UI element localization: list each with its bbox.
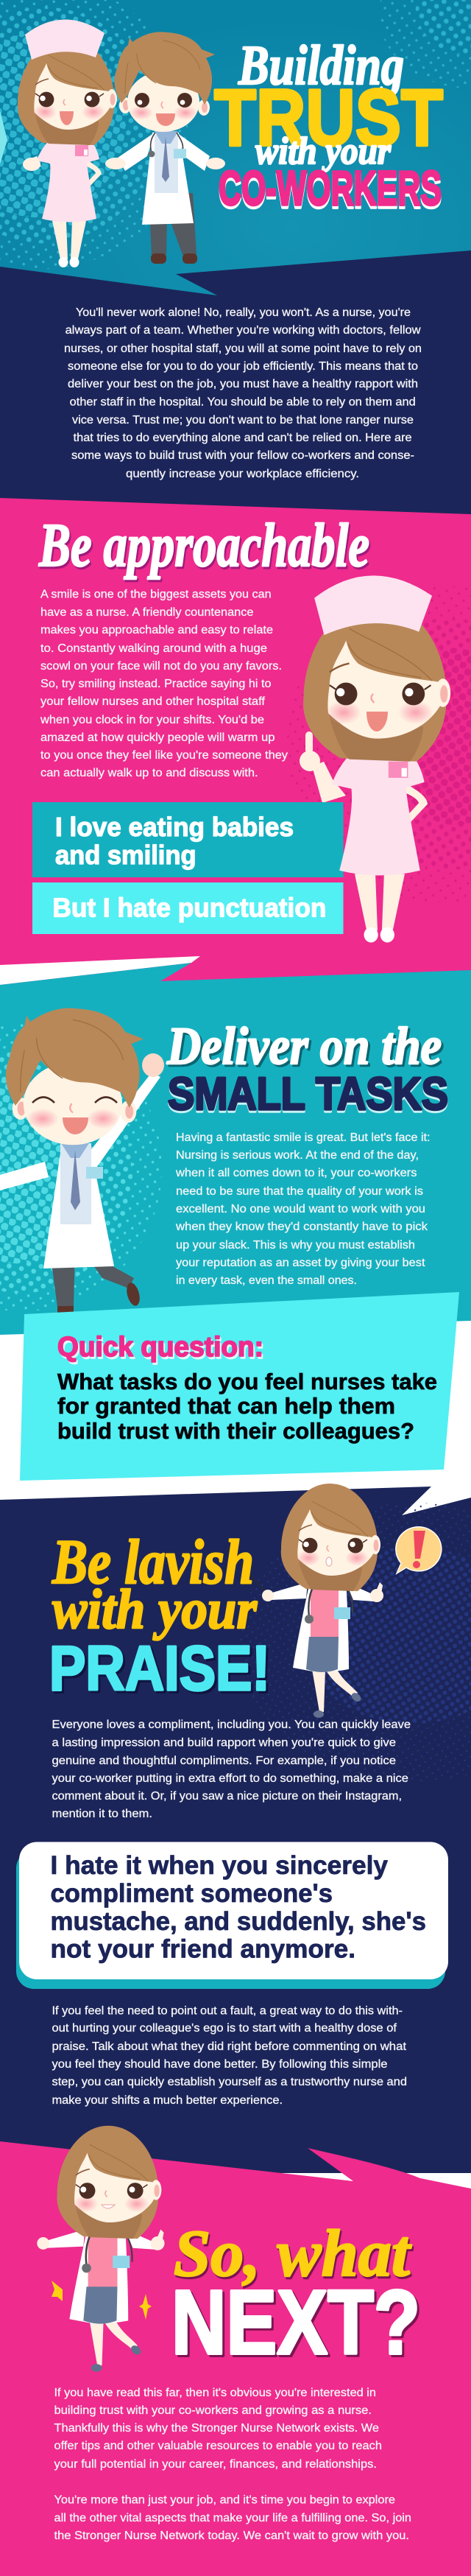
illustration: nurse with thumbs up bbox=[303, 575, 450, 942]
panel: quick question: build trust with their colleagues? bbox=[57, 1418, 414, 1444]
text block: praise paragraph two: step, you can quickly establish yourself as a trustworthy nurse and bbox=[52, 2076, 407, 2088]
callout: I love eating babies: and smiling bbox=[55, 840, 196, 870]
text block: small tasks paragraph bbox=[175, 1131, 430, 1287]
callout: I love eating babies bbox=[32, 802, 343, 877]
icon: sparkle right bbox=[139, 2294, 152, 2320]
callout: mustache quote: compliment someone's bbox=[50, 1879, 333, 1908]
icon: exclamation bubble bbox=[396, 1527, 442, 1573]
heading: Be lavish with your Praise: Be lavish bbox=[52, 1526, 254, 1597]
text block: intro paragraph: other staff in the hospital. You should be able to rely on them and bbox=[70, 396, 416, 408]
text block: praise paragraph two: praise. Talk about what they did right before commenting on what bbox=[52, 2040, 407, 2053]
text block: approachable paragraph: scowl on your face will not do you any favors. bbox=[40, 660, 282, 673]
title: Building Trust with your Co-Workers bbox=[214, 35, 443, 218]
heading: Be lavish with your Praise: PRAISE! bbox=[49, 1634, 270, 1704]
panel: quick question: Quick question: bbox=[57, 1332, 263, 1363]
text block: closing paragraphs: Thankfully this is why the Stronger Nurse Network exists. We bbox=[54, 2422, 379, 2435]
text block: intro paragraph: someone else for you to do your job efficiently. This means that to bbox=[68, 360, 418, 373]
title: Building Trust with your Co-Workers: Building bbox=[238, 35, 404, 96]
text block: approachable paragraph: A smile is one of the biggest assets you can bbox=[40, 588, 272, 601]
nurse character bbox=[18, 19, 117, 267]
panel: quick question bbox=[20, 1292, 459, 1481]
icon: sparkle left bbox=[52, 2281, 63, 2301]
text block: closing paragraphs: your full potential in your career, finances, and relationships. bbox=[54, 2458, 377, 2471]
text block: approachable paragraph: your fellow nurses and other hospital staff bbox=[40, 695, 266, 708]
text block: small tasks paragraph: Having a fantastic smile is great. But let's face it: bbox=[176, 1131, 430, 1144]
text block: intro paragraph bbox=[64, 306, 422, 480]
text block: praise paragraph two bbox=[52, 2005, 407, 2107]
text block: praise paragraph one: comment about it. Or, if you saw a nice picture on their Instagram, bbox=[52, 1790, 402, 1803]
text block: praise paragraph two: If you feel the need to point out a fault, a great way to do this with- bbox=[52, 2005, 403, 2018]
text block: intro paragraph: deliver your best on the job, you must have a healthy rapport with bbox=[68, 378, 418, 390]
text block: approachable paragraph: when you clock in for your shifts. You'd be bbox=[40, 714, 264, 726]
heading: So, what Next: So, what bbox=[174, 2217, 412, 2290]
heading: Be approachable: Be approachable bbox=[38, 511, 369, 580]
text block: praise paragraph one: genuine and thoughtful compliments. For example, if you notice bbox=[52, 1755, 396, 1767]
text block: closing paragraphs: all the other vital aspects that make your life a fulfilling one. So, join bbox=[54, 2512, 411, 2524]
illustration: nurse and doctor bbox=[18, 19, 225, 267]
illustration: doctor with sparkles bbox=[37, 2126, 165, 2372]
text block: small tasks paragraph: when it all comes down to it, your co-workers bbox=[175, 1167, 417, 1179]
heading: So, what Next: NEXT? bbox=[171, 2273, 420, 2373]
panel: quick question: Quick question: bbox=[59, 1334, 265, 1365]
text block: approachable paragraph bbox=[40, 588, 288, 779]
panel: be approachable background bbox=[0, 498, 471, 987]
heading: Be lavish with your Praise: with your bbox=[52, 1579, 258, 1640]
panel: quick question: What tasks do you feel nurses take bbox=[57, 1369, 437, 1394]
heading: Be lavish with your Praise bbox=[49, 1526, 272, 1706]
text block: small tasks paragraph: excellent. No one would want to work with you bbox=[176, 1203, 425, 1215]
heading: So, what Next: So, what bbox=[175, 2219, 414, 2292]
text block: praise paragraph one: your co-worker putting in extra effort to do something, make a nice bbox=[52, 1772, 408, 1785]
heading: Deliver on the Small Tasks: Deliver on the bbox=[169, 1019, 444, 1078]
callout: mustache quote: I hate it when you sincerely bbox=[50, 1851, 389, 1880]
illustration: doctor with pointer bbox=[227, 1484, 383, 1718]
text block: intro paragraph: quently increase your workplace efficiency. bbox=[126, 468, 359, 480]
panel: intro navy background bbox=[0, 250, 471, 516]
text block: intro paragraph: nurses, or other hospital staff, you will at some point have to rely on bbox=[64, 343, 422, 355]
text block: approachable paragraph: to. Constantly walking around with a huge bbox=[40, 642, 267, 655]
text block: closing paragraphs: the Stronger Nurse Network today. We can't wait to grow with you. bbox=[54, 2530, 409, 2542]
text block: intro paragraph: always part of a team. Whether you're working with doctors, fellow bbox=[65, 324, 421, 337]
heading: So, what Next: NEXT? bbox=[174, 2275, 422, 2376]
text block: small tasks paragraph: need to be sure that the quality of your work is bbox=[176, 1185, 423, 1198]
text block: intro paragraph: that tries to do everything alone and can't be relied on. Here are bbox=[74, 432, 412, 444]
text block: approachable paragraph: can actually walk up to and discuss with. bbox=[40, 767, 258, 779]
text block: approachable paragraph: amazed at how quickly people will warm up bbox=[40, 731, 275, 744]
callout: mustache quote: not your friend anymore. bbox=[50, 1934, 355, 1964]
text block: approachable paragraph: makes you approachable and easy to relate bbox=[40, 624, 273, 636]
heading: Be lavish with your Praise: PRAISE! bbox=[52, 1636, 272, 1706]
heading: Deliver on the Small Tasks bbox=[166, 1017, 448, 1122]
text block: approachable paragraph: have as a nurse. A friendly countenance bbox=[40, 606, 254, 619]
panel: be lavish background bbox=[0, 1487, 471, 2173]
panel: what next background bbox=[0, 2141, 471, 2576]
callout: But I hate punctuation: But I hate punctuation bbox=[52, 893, 326, 922]
heading: Be approachable: Be approachable bbox=[40, 513, 371, 582]
text block: approachable paragraph: to you once they feel like you're someone they bbox=[40, 749, 288, 762]
panel: header background bbox=[0, 0, 471, 302]
text block: intro paragraph: some ways to build trust with your fellow co-workers and conse- bbox=[71, 449, 414, 462]
panel: small tasks background bbox=[0, 963, 471, 1335]
title: Building Trust with your Co-Workers: with your bbox=[255, 130, 392, 172]
callout: But I hate punctuation bbox=[32, 882, 343, 934]
text block: closing paragraphs bbox=[54, 2387, 411, 2542]
text block: small tasks paragraph: in every task, even the small ones. bbox=[176, 1274, 357, 1287]
text block: small tasks paragraph: when they know they'd constantly have to pick bbox=[175, 1221, 428, 1233]
text block: praise paragraph one: mention it to them. bbox=[52, 1808, 152, 1820]
illustration: waving doctor bbox=[0, 1008, 164, 1313]
heading: Deliver on the Small Tasks: Deliver on the bbox=[166, 1017, 442, 1075]
text block: praise paragraph one: a lasting impression and build rapport when you're quick to give bbox=[52, 1737, 396, 1749]
text block: closing paragraphs: offer tips and other valuable resources to enable you to reach bbox=[54, 2440, 382, 2452]
decoration: white wedge bbox=[0, 956, 200, 985]
text block: closing paragraphs: If you have read this far, then it's obvious you're interested in bbox=[54, 2387, 376, 2399]
text block: approachable paragraph: So, try smiling instead. Practice saying hi to bbox=[40, 678, 272, 690]
text block: praise paragraph two: you feel they should have done better. By following this simple bbox=[52, 2058, 388, 2071]
text block: small tasks paragraph: your reputation as an asset by giving your best bbox=[176, 1257, 425, 1269]
text block: small tasks paragraph: up your slack. This is why you must establish bbox=[176, 1239, 415, 1252]
text block: closing paragraphs: building trust with your co-workers and growing as a nurse. bbox=[54, 2404, 372, 2417]
illustration: thumbs-up arm bbox=[300, 731, 346, 803]
text block: small tasks paragraph: Nursing is serious work. At the end of the day, bbox=[176, 1149, 419, 1162]
text block: praise paragraph two: out hurting your colleague's ego is to start with a healthy dose of bbox=[52, 2022, 397, 2035]
panel: quick question: for granted that can help them bbox=[57, 1393, 395, 1419]
callout: I love eating babies: I love eating babies bbox=[55, 812, 294, 842]
text block: praise paragraph two: make your shifts a much better experience. bbox=[52, 2094, 283, 2107]
text block: intro paragraph: vice versa. Trust me; you don't want to be that lone ranger nurse bbox=[72, 414, 414, 427]
text block: closing paragraphs: You're more than just your job, and it's time you begin to explore bbox=[54, 2494, 395, 2506]
callout: mustache quote: mustache, and suddenly, she's bbox=[50, 1907, 426, 1936]
text block: intro paragraph: You'll never work alone! No, really, you won't. As a nurse, you're bbox=[76, 306, 411, 319]
doctor character bbox=[105, 32, 225, 264]
text block: praise paragraph one bbox=[52, 1719, 411, 1820]
text block: praise paragraph one: Everyone loves a compliment, including you. You can quickly leave bbox=[52, 1719, 411, 1731]
heading: So, what Next bbox=[171, 2217, 422, 2376]
callout: mustache quote bbox=[16, 1842, 448, 1989]
